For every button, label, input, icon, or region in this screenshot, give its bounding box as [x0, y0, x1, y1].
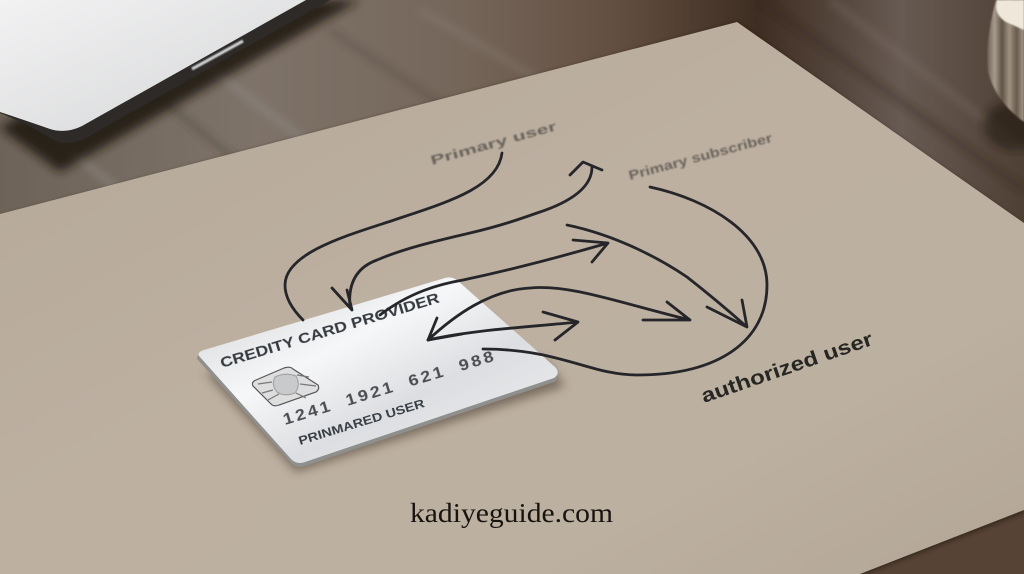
watermark: site name: kadiyeguide.com: [410, 498, 613, 528]
card shadow: [205, 360, 565, 472]
metal bowl: [984, 0, 1024, 151]
card heading: CREDITY CARD PROVIDER: [218, 290, 442, 372]
arrow: primary user to card: [285, 153, 502, 320]
label: primary user: Primary user: [429, 118, 558, 168]
card face: [199, 277, 558, 463]
arrow: card to top centre: [350, 162, 602, 307]
arrow: double-headed short: [428, 312, 578, 340]
card number: 1241 1921 621 988: [281, 348, 498, 429]
card edge: [197, 279, 558, 467]
arrow: large loop to card number: [483, 187, 767, 375]
chip: [252, 367, 319, 406]
tablet device: [0, 0, 360, 172]
flow arrows: [285, 153, 767, 375]
arrow: card to upper right: [380, 240, 608, 315]
arrow: curve to right junction: [567, 225, 747, 327]
card holder name: PRINMARED USER: [297, 396, 427, 448]
label: authorized user: authorized user: [698, 328, 876, 408]
arrowhead: into card top: [332, 288, 352, 310]
arrow: double-headed long: [428, 287, 690, 340]
label: primary subscriber: Primary subscriber: [627, 130, 774, 183]
credit card: [197, 277, 565, 472]
